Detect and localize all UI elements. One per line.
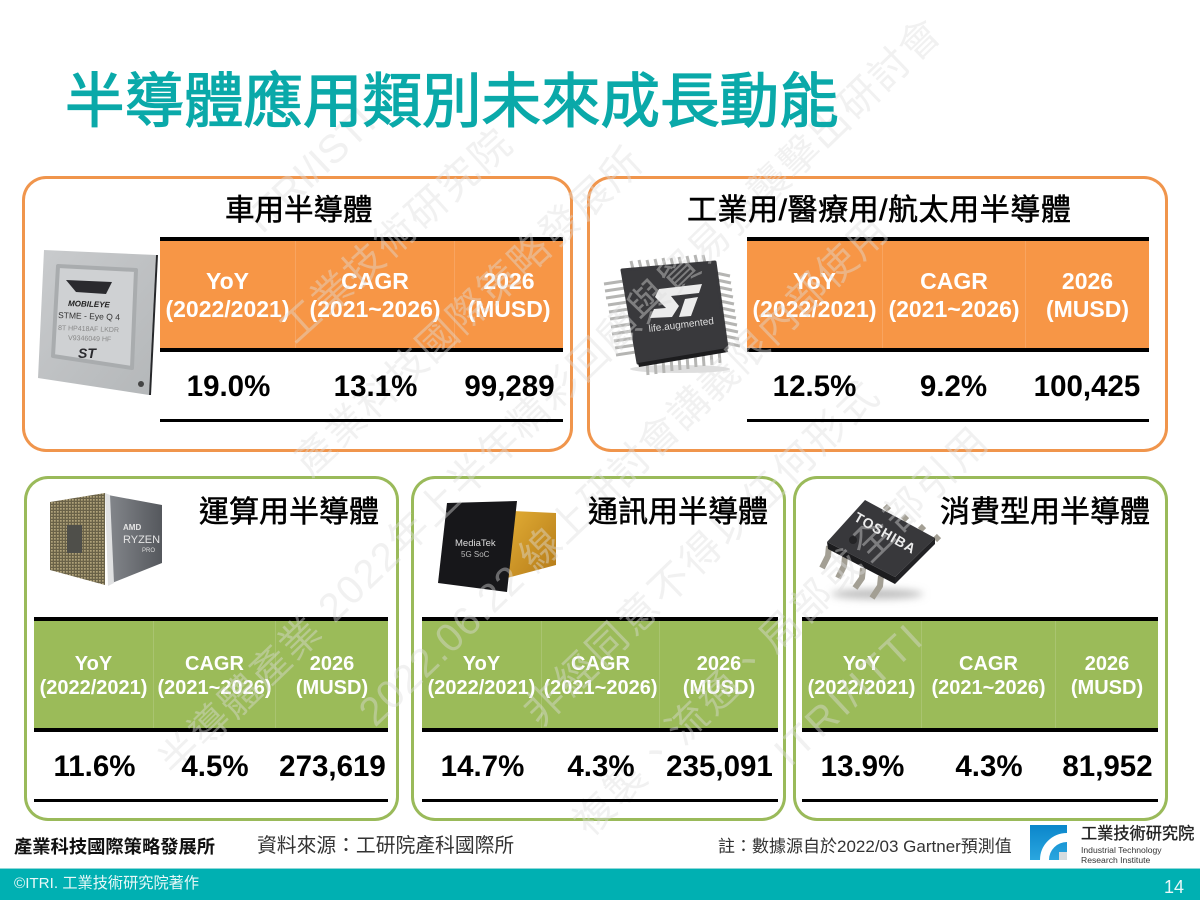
table values: 81,952 <box>1062 750 1153 783</box>
logo text: 工業技術研究院 <box>1081 825 1194 843</box>
icon: Mobileye chip: 8T HP418AF LKDR <box>58 325 119 334</box>
table header: CAGR <box>920 268 988 294</box>
footer: data source: 資料來源：工研院產科國際所 <box>257 835 514 857</box>
footer: note: 註：數據源自於2022/03 Gartner預測值 <box>718 837 1012 856</box>
table values: 12.5% <box>773 370 856 403</box>
table: industrial, medical and aerospace <box>747 237 1149 422</box>
panel: computing semiconductors <box>24 476 399 821</box>
table values: 13.1% <box>334 370 417 403</box>
table header: 2026 <box>310 652 354 674</box>
icon: AMD Ryzen processor: AMD <box>123 523 141 532</box>
table header: 2026 <box>697 652 741 674</box>
logo: ITRI <box>1030 824 1194 864</box>
heading: communications: 通訊用半導體 <box>588 496 768 529</box>
icon: Toshiba chip <box>819 500 941 604</box>
watermark: 工業技術研究院 <box>272 122 520 352</box>
icon: MediaTek chip <box>438 501 556 592</box>
table header: (2021~2026) <box>158 676 271 698</box>
icon: MediaTek chip: 5G SoC <box>461 550 490 559</box>
icon: Mobileye chip: V9346049 HF <box>68 335 111 344</box>
icon: AMD Ryzen processor: PRO <box>142 548 155 554</box>
table values: 9.2% <box>920 370 987 403</box>
logo text: Industrial Technology <box>1081 845 1162 855</box>
icon: Mobileye chip: STME - Eye Q 4 <box>58 310 120 322</box>
table: consumer <box>802 617 1158 802</box>
watermark: 複製、流通、局部或全部引用 <box>565 420 996 844</box>
table header: (2022/2021) <box>165 296 290 322</box>
heading: consumer: 消費型用半導體 <box>940 496 1150 529</box>
table header: YoY <box>793 268 836 294</box>
table header: YoY <box>843 652 880 674</box>
icon: Toshiba chip: TOSHIBA <box>852 509 918 557</box>
heading: automotive: 車用半導體 <box>225 194 373 227</box>
watermark: 半導體產業 2022年上半年精彩回顧與貿易強襲擊出研討會 <box>151 11 950 784</box>
icon: ITRI mark <box>1030 825 1067 860</box>
watermark: ITRI/ISTI <box>238 99 384 242</box>
table values <box>422 732 778 802</box>
title: 半導體應用類別未來成長動能 <box>65 68 838 135</box>
icon: AMD Ryzen processor <box>50 493 162 586</box>
icon: Mobileye chip: MOBILEYE <box>68 299 111 309</box>
logo text <box>1081 824 1194 864</box>
table header: (2022/2021) <box>428 676 535 698</box>
table header: 2026 <box>483 268 535 294</box>
icon: ST QFP chip <box>604 254 740 376</box>
table header <box>160 237 563 352</box>
table header: (MUSD) <box>296 676 368 698</box>
table: communications <box>422 617 778 802</box>
watermark: 產業科技國際策略發展所 <box>286 140 651 485</box>
icon: MediaTek chip: MediaTek <box>455 538 496 549</box>
table values: 235,091 <box>666 750 773 783</box>
table header: 2026 <box>1085 652 1129 674</box>
heading: industrial, medical and aerospace: 工業用/醫療用/航太用半導體 <box>687 194 1071 227</box>
table header: (MUSD) <box>683 676 755 698</box>
table header: CAGR <box>571 652 630 674</box>
table header: (2022/2021) <box>808 676 915 698</box>
table values: 4.3% <box>955 750 1023 783</box>
panel: automotive semiconductors <box>22 176 573 452</box>
icon: ST QFP chip: life.augmented <box>648 316 714 335</box>
table values <box>802 732 1158 802</box>
table header: YoY <box>206 268 249 294</box>
icon: Mobileye chip: ST <box>78 345 97 361</box>
copyright: ©ITRI. 工業技術研究院著作 <box>14 875 199 892</box>
table header: (MUSD) <box>1046 296 1129 322</box>
heading: computing: 運算用半導體 <box>199 496 379 529</box>
table header <box>802 617 1158 732</box>
table: automotive <box>160 237 563 422</box>
watermark: 非經同意不得以任何形式 <box>516 374 887 734</box>
table header: (2022/2021) <box>40 676 147 698</box>
table header: YoY <box>75 652 112 674</box>
table values: 14.7% <box>441 750 524 783</box>
table header: (MUSD) <box>1071 676 1143 698</box>
table values: 99,289 <box>464 370 555 403</box>
table values <box>34 732 388 802</box>
table header: 2026 <box>1062 268 1113 294</box>
table values: 4.3% <box>567 750 635 783</box>
table header: (2021~2026) <box>932 676 1045 698</box>
table values <box>747 352 1149 422</box>
page number: 14 <box>1164 877 1184 897</box>
table: computing <box>34 617 388 802</box>
table values: 273,619 <box>279 750 386 783</box>
table header: (2022/2021) <box>752 296 877 322</box>
table values: 13.9% <box>821 750 904 783</box>
panel: communications semiconductors <box>411 476 786 821</box>
panel: industrial, medical and aerospace semiconductors <box>587 176 1168 452</box>
table header <box>34 617 388 732</box>
icon: AMD Ryzen processor: RYZEN <box>123 534 160 546</box>
watermark: ITRI/ITTI <box>766 617 931 775</box>
table values <box>160 352 563 422</box>
watermark: 2022.06.22 線上研討會講義限內部使用 <box>351 209 897 734</box>
table values: 4.5% <box>181 750 249 783</box>
icon: Mobileye chip <box>38 250 158 395</box>
table values: 19.0% <box>187 370 270 403</box>
panel: consumer semiconductors <box>793 476 1168 821</box>
table header: (2021~2026) <box>544 676 657 698</box>
table values: 11.6% <box>53 750 136 783</box>
footer: organisation name: 產業科技國際策略發展所 <box>14 836 215 857</box>
table header: YoY <box>463 652 500 674</box>
table header: (2021~2026) <box>309 296 441 322</box>
table values: 100,425 <box>1034 370 1140 403</box>
footer bar <box>0 868 1200 900</box>
table header <box>422 617 778 732</box>
table header <box>747 237 1149 352</box>
table header: (2021~2026) <box>888 296 1020 322</box>
table header: CAGR <box>341 268 409 294</box>
table header: (MUSD) <box>467 296 551 322</box>
logo text: Research Institute <box>1081 854 1150 864</box>
table header: CAGR <box>959 652 1018 674</box>
table header: CAGR <box>185 652 244 674</box>
